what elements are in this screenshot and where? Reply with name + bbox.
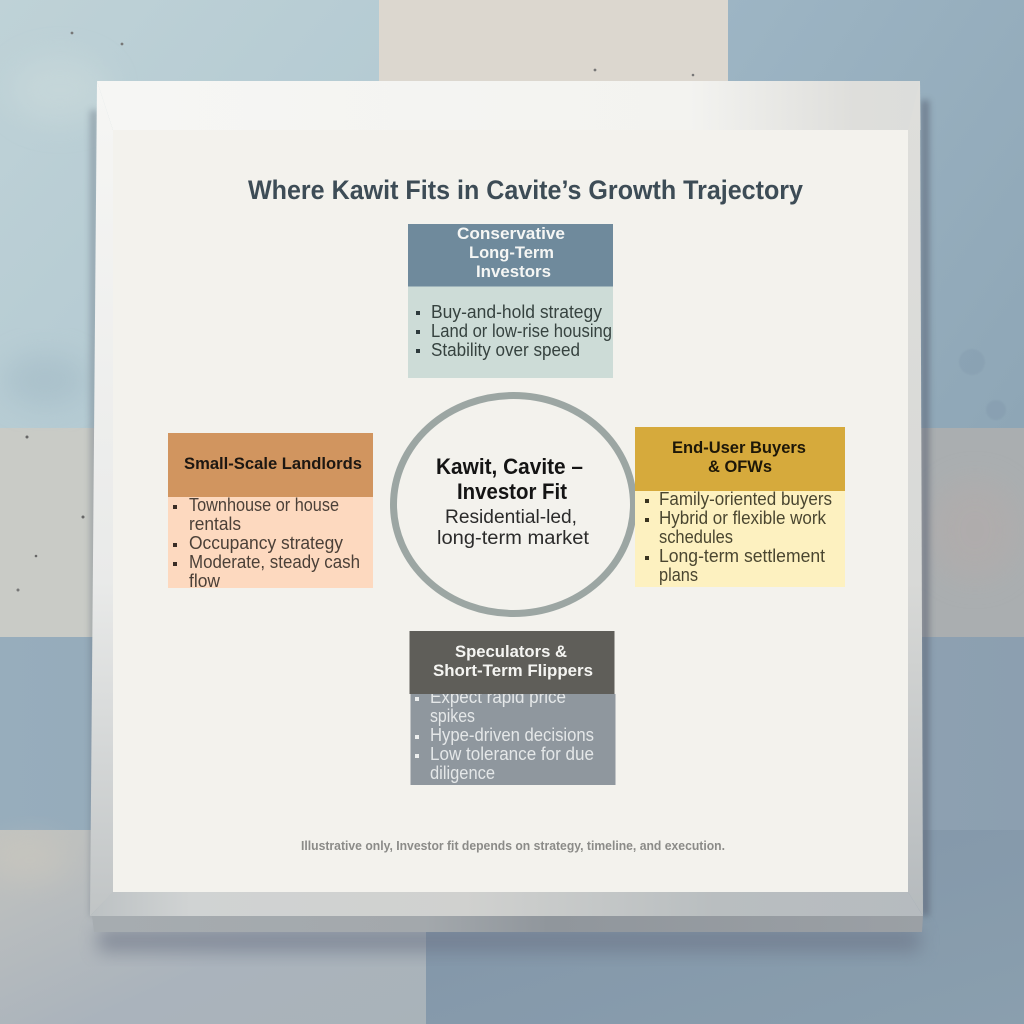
header: conservative long-term investors: Conservative	[457, 224, 565, 243]
list: conservative long-term investors: Buy-and-hold strategy	[431, 302, 602, 322]
list: small-scale landlords: Occupancy strategy	[189, 533, 343, 553]
list: end-user buyers and OFWs: Family-oriented buyers	[659, 489, 832, 509]
list: speculators and short-term flippers: Low tolerance for due	[430, 744, 594, 764]
title: Where Kawit Fits in Cavite’s Growth Trajectory	[248, 175, 803, 205]
header: conservative long-term investors: Long-Term	[469, 243, 554, 262]
list: speculators and short-term flippers	[410, 687, 616, 785]
header: speculators and short-term flippers: Speculators &	[455, 642, 567, 661]
centre circle: Kawit, Cavite investor fit: Residential-led,	[445, 507, 577, 528]
soft shadow beneath the board	[98, 928, 920, 952]
inner panel	[113, 130, 908, 892]
panel: end-user buyers and OFWs	[635, 427, 845, 587]
list: end-user buyers and OFWs: schedules	[659, 527, 733, 547]
header: conservative long-term investors: Investors	[476, 262, 551, 281]
list: conservative long-term investors: Stability over speed	[431, 340, 580, 360]
header: end-user buyers and OFWs	[635, 427, 845, 491]
list: speculators and short-term flippers: spikes	[430, 706, 475, 726]
header: speculators and short-term flippers	[410, 631, 614, 694]
list: speculators and short-term flippers: Expect rapid price	[430, 687, 566, 707]
centre circle: Kawit, Cavite investor fit	[394, 396, 634, 614]
header: small-scale landlords: Small-Scale Landlords	[184, 454, 362, 473]
list: end-user buyers and OFWs: Long-term settlement	[659, 546, 825, 566]
list: small-scale landlords: flow	[189, 571, 221, 591]
list: end-user buyers and OFWs	[635, 489, 845, 587]
panel: small-scale landlords	[168, 433, 373, 591]
panel: conservative long-term investors	[408, 224, 613, 378]
list: conservative long-term investors	[408, 286, 613, 378]
list: conservative long-term investors: Land or low-rise housing	[431, 321, 612, 341]
header: small-scale landlords	[168, 433, 373, 497]
centre circle: Kawit, Cavite investor fit: long-term market	[437, 528, 590, 549]
list: speculators and short-term flippers: Hype-driven decisions	[430, 725, 594, 745]
header: end-user buyers and OFWs: & OFWs	[708, 457, 772, 476]
panel shadow	[90, 100, 929, 916]
header: conservative long-term investors	[408, 224, 613, 286]
list: small-scale landlords: Moderate, steady cash	[189, 552, 360, 572]
footnote: Illustrative only, Investor fit depends on strategy, timeline, and execution.	[301, 838, 725, 853]
centre circle: Kawit, Cavite investor fit: Kawit, Cavite –	[436, 454, 583, 479]
list: end-user buyers and OFWs: plans	[659, 565, 698, 585]
board frame	[90, 81, 923, 932]
list: small-scale landlords: rentals	[189, 514, 241, 534]
header: end-user buyers and OFWs: End-User Buyers	[672, 438, 806, 457]
header: speculators and short-term flippers: Short-Term Flippers	[433, 661, 593, 680]
panel: speculators and short-term flippers	[410, 631, 616, 785]
list: speculators and short-term flippers: diligence	[430, 763, 495, 783]
list: small-scale landlords: Townhouse or house	[189, 495, 339, 515]
list: small-scale landlords	[168, 495, 373, 591]
centre circle: Kawit, Cavite investor fit: Investor Fit	[457, 479, 568, 504]
list: end-user buyers and OFWs: Hybrid or flexible work	[659, 508, 827, 528]
